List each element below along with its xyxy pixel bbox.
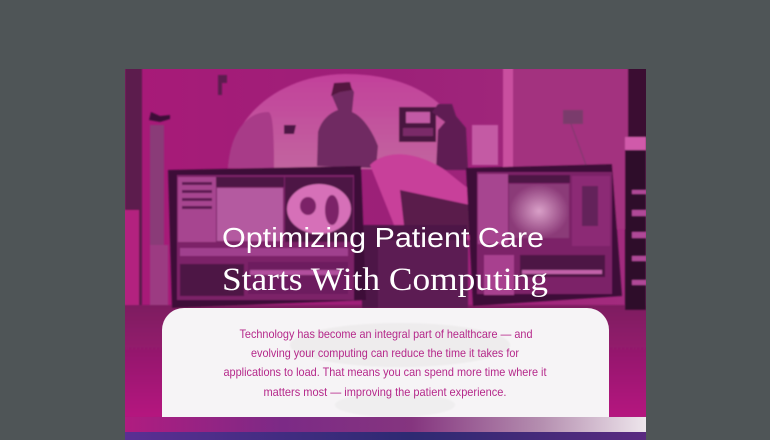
technician left	[317, 82, 378, 168]
shelf left	[150, 125, 164, 245]
ceiling fixture	[218, 75, 227, 95]
equipment right	[472, 125, 498, 165]
title line 1: Optimizing Patient Care	[222, 222, 544, 253]
patient bed	[370, 154, 470, 240]
title line 2: Starts With Computing	[222, 262, 548, 298]
cabinet right	[625, 150, 646, 310]
infographic canvas	[125, 69, 646, 440]
bottom band	[125, 432, 646, 440]
technician right	[432, 104, 468, 170]
right monitor	[466, 164, 622, 306]
title	[222, 222, 548, 298]
wall socket	[563, 110, 583, 124]
body text: Technology has become an integral part of healthcare — and	[240, 327, 532, 341]
dark equipment between monitors	[362, 225, 467, 308]
left monitor	[168, 166, 366, 308]
body text: matters most — improving the patient experience.	[264, 385, 506, 399]
CT scanner gantry	[228, 74, 460, 170]
wall screen	[399, 107, 436, 142]
white text card	[162, 308, 609, 417]
body text: evolving your computing can reduce the time it takes for	[251, 346, 519, 360]
body text	[224, 327, 547, 399]
body text: applications to load. That means you can spend more time where it	[224, 365, 547, 379]
gradient strip	[125, 417, 646, 432]
hero photo: CT scanner room with monitors	[120, 60, 650, 417]
